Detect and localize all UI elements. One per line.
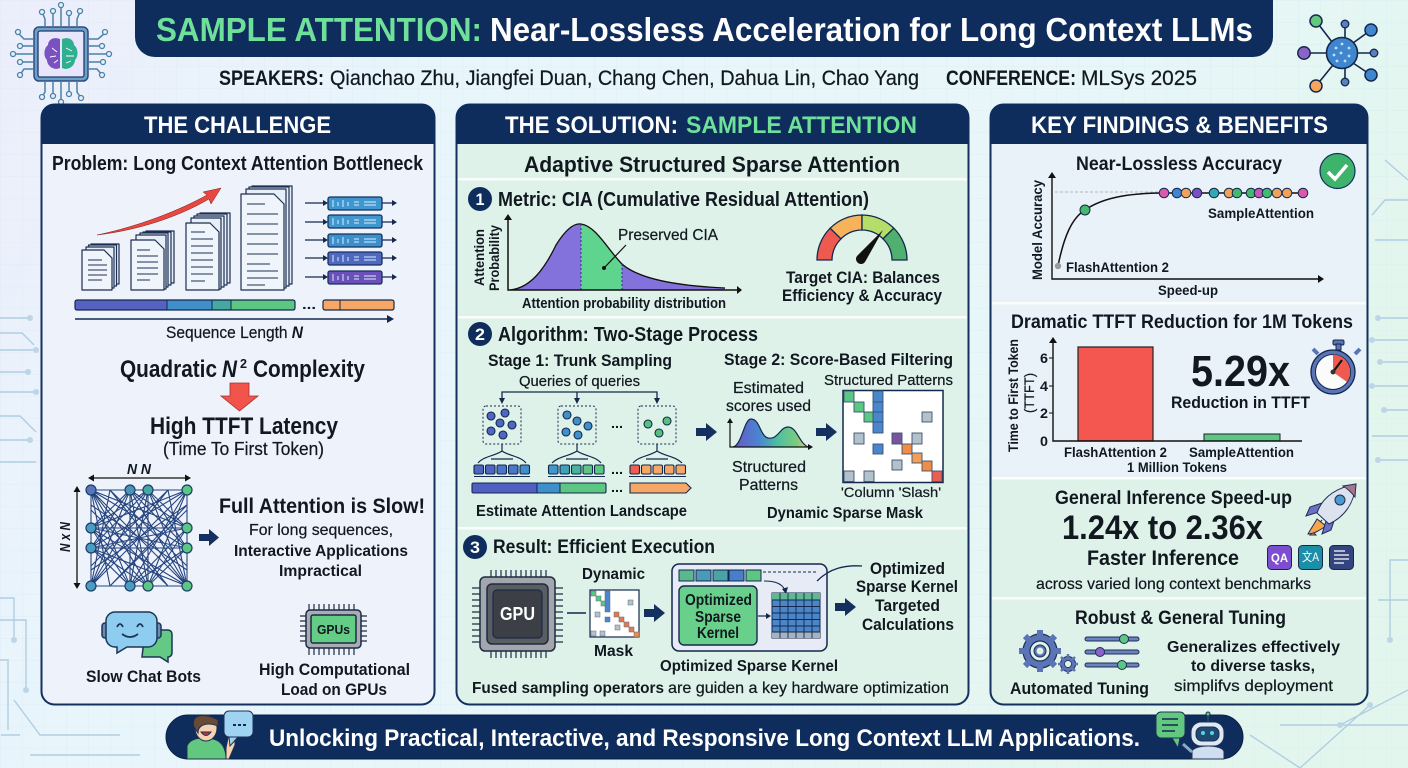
gauge caption xyxy=(782,268,942,305)
finding: near-lossless accuracy xyxy=(1029,154,1355,298)
gauge: target cia xyxy=(817,215,907,264)
chart: ttft bars: FlashAttention 2 xyxy=(1064,444,1167,460)
stat: 1.24x to 2.36x: 1.24x to 2.36x xyxy=(1062,509,1263,547)
finding: robust tuning: Robust & General Tuning xyxy=(1075,608,1286,629)
diagram: full attention network: N x N xyxy=(57,521,74,552)
icon: brain chip xyxy=(10,2,112,104)
panel heading: THE CHALLENGE xyxy=(144,112,331,139)
targeted calculations text: Sparse Kernel xyxy=(856,577,958,596)
finding: robust tuning: Automated Tuning xyxy=(1010,679,1149,698)
icon: stopwatch xyxy=(1311,340,1360,394)
chart: ttft bars: SampleAttention xyxy=(1189,444,1294,460)
chart: ttft bars: (TTFT) xyxy=(1022,373,1037,413)
finding: ttft reduction: Dramatic TTFT Reduction for 1M Tokens xyxy=(1011,312,1353,333)
tuning description xyxy=(1167,639,1340,695)
footer banner xyxy=(166,711,1243,759)
icon: gears xyxy=(1019,630,1078,674)
arrow: to full attention xyxy=(199,529,219,546)
section 3: result xyxy=(463,535,958,697)
chart: ttft bars: 2 xyxy=(1040,405,1048,421)
stage 2: score-based filtering: Stage 2: Score-Based Filtering xyxy=(724,350,953,369)
panel: the solution xyxy=(456,104,969,704)
panel heading xyxy=(505,112,917,139)
section 3: result: Result: Efficient Execution xyxy=(493,537,715,558)
panel: key findings xyxy=(990,104,1368,704)
stage 2: score-based filtering: Patterns xyxy=(739,477,798,494)
complexity text xyxy=(120,356,366,383)
chart: ttft bars: Time to First Token xyxy=(1006,339,1021,452)
finding: robust tuning xyxy=(1010,608,1340,698)
stat: 5.29x: 5.29x xyxy=(1191,347,1290,396)
speakers and conference line: CONFERENCE: xyxy=(946,67,1076,90)
panel heading: SAMPLE ATTENTION xyxy=(686,112,917,139)
finding: ttft reduction xyxy=(1006,312,1360,475)
finding: general inference speed-up: Faster Inference xyxy=(1087,547,1239,570)
panel: the challenge xyxy=(41,104,435,704)
title banner xyxy=(135,0,1273,57)
chart: accuracy vs speed-up: SampleAttention xyxy=(1208,205,1314,221)
gauge caption: Target CIA: Balances xyxy=(786,268,940,287)
dynamic mask: Dynamic xyxy=(582,566,645,583)
section 2: algorithm xyxy=(468,322,953,522)
icon: gpu: GPU xyxy=(500,604,535,624)
chart: ttft bars xyxy=(1006,337,1302,475)
targeted calculations text: Calculations xyxy=(862,615,954,634)
finding: general inference speed-up: across varied long context benchmarks xyxy=(1036,576,1311,593)
text block: full attention is slow: Full Attention is Slow! xyxy=(219,495,425,518)
chart: attention probability distribution: Probability xyxy=(486,225,502,291)
label: high computational load: Load on GPUs xyxy=(281,680,387,699)
complexity text: 2 xyxy=(240,356,247,371)
targeted calculations text xyxy=(856,559,958,634)
dynamic mask xyxy=(582,566,645,660)
icon: robot with speech bubble xyxy=(1156,712,1224,759)
fused sampling note: Fused sampling operators xyxy=(472,680,664,697)
axis label: sequence length: Sequence Length N xyxy=(166,323,304,342)
fused sampling note: are guiden a key hardware optimization xyxy=(668,680,949,697)
latency heading: High TTFT Latency xyxy=(150,413,339,440)
speakers and conference line: MLSys 2025 xyxy=(1081,67,1197,90)
arrow: stage 1 to stage 2 xyxy=(696,423,717,441)
stage 1: trunk sampling: Estimate Attention Landscape xyxy=(476,503,687,520)
panel heading: THE SOLUTION: xyxy=(505,112,678,139)
section 1: metric xyxy=(468,187,942,312)
stage 1: trunk sampling: ... xyxy=(611,415,623,431)
finding: near-lossless accuracy: Near-Lossless Accuracy xyxy=(1076,154,1282,175)
stage 1: trunk sampling: ... xyxy=(611,479,623,495)
diagram: full attention network: N N xyxy=(127,461,152,478)
icons: benchmark tasks: 文A xyxy=(1302,549,1319,564)
token rows xyxy=(305,197,397,284)
title banner: Near-Lossless Acceleration for Long Context LLMs xyxy=(490,11,1253,48)
icon: gpu chip: GPUs xyxy=(317,622,350,637)
finding: general inference speed-up xyxy=(1036,484,1356,593)
tuning description: Generalizes effectively xyxy=(1167,639,1340,656)
complexity text: N xyxy=(222,356,238,383)
stage 2: score-based filtering xyxy=(724,350,953,522)
stage 2: score-based filtering: Structured xyxy=(732,459,806,476)
icon: gpu xyxy=(472,570,563,658)
icon: neural hub xyxy=(1298,15,1378,92)
stage 1: trunk sampling xyxy=(472,351,691,520)
label: slow chat bots: Slow Chat Bots xyxy=(86,667,201,686)
stage 2: score-based filtering: Structured Patterns xyxy=(824,373,953,389)
chart: attention probability distribution: Attention probability distribution xyxy=(522,295,726,312)
icons: benchmark tasks xyxy=(1268,546,1354,570)
chart: attention probability distribution: Attention xyxy=(471,229,487,286)
chart: ttft bars: 6 xyxy=(1040,350,1048,366)
finding: general inference speed-up: General Inference Speed-up xyxy=(1055,488,1292,509)
targeted calculations text: Targeted xyxy=(875,596,940,615)
kernel label: Optimized Sparse Kernel xyxy=(660,658,838,675)
chart: accuracy vs speed-up: FlashAttention 2 xyxy=(1066,259,1169,275)
sequence bar xyxy=(75,296,394,323)
label: high computational load xyxy=(259,660,410,699)
icon: person with speech bubble xyxy=(187,711,253,759)
complexity text: Quadratic xyxy=(120,356,217,383)
dynamic mask: Mask xyxy=(594,643,633,660)
section 3: result: 3 xyxy=(470,538,480,557)
icon: gpu chip xyxy=(300,604,367,655)
icon: chat bot xyxy=(102,612,172,662)
complexity text: Complexity xyxy=(253,356,366,383)
chart: attention probability distribution xyxy=(471,214,742,312)
chart: accuracy vs speed-up: Model Accuracy xyxy=(1029,180,1045,280)
icon: check xyxy=(1320,154,1355,188)
kernel box: Sparse xyxy=(695,609,741,626)
kernel box: Kernel xyxy=(697,625,739,642)
speakers and conference line: SPEAKERS: xyxy=(219,67,324,90)
stage 1: trunk sampling: ... xyxy=(611,461,623,477)
stage 1: trunk sampling: Queries of queries xyxy=(519,374,640,390)
text block: full attention is slow: For long sequences, xyxy=(249,522,393,539)
section 2: algorithm: 2 xyxy=(475,325,485,344)
title text: SAMPLE ATTENTION: xyxy=(156,11,482,48)
stage 2: score-based filtering: scores used xyxy=(726,398,811,415)
subheading: Adaptive Structured Sparse Attention xyxy=(524,152,900,177)
section 1: metric: Metric: CIA (Cumulative Residual Attention) xyxy=(498,189,869,211)
icon: sliders xyxy=(1085,634,1139,670)
section 2: algorithm: Algorithm: Two-Stage Process xyxy=(498,324,758,346)
arrow: red growth xyxy=(97,188,221,235)
arrow: to targeted calculations xyxy=(835,598,856,616)
latency subtext: (Time To First Token) xyxy=(163,439,324,459)
arrow: mask to kernel xyxy=(644,604,665,622)
targeted calculations text: Optimized xyxy=(870,559,945,578)
tuning description: simplifvs deployment xyxy=(1174,678,1334,695)
kernel box: Optimized xyxy=(685,592,752,609)
chart: ttft bars: 0 xyxy=(1040,433,1048,449)
chart: ttft bars: 1 Million Tokens xyxy=(1127,459,1227,475)
callout leader xyxy=(817,566,862,581)
section 1: metric: 1 xyxy=(476,190,484,209)
label: high computational load: High Computational xyxy=(259,660,410,679)
chart: attention probability distribution: Preserved CIA xyxy=(618,227,718,244)
stage 1: trunk sampling: Stage 1: Trunk Sampling xyxy=(488,351,672,370)
arrow: red down xyxy=(221,383,258,411)
sequence bar: ... xyxy=(302,296,316,312)
chart: accuracy vs speed-up: Speed-up xyxy=(1158,282,1218,298)
icon: rocket xyxy=(1306,484,1356,535)
stage 2: score-based filtering: 'Column 'Slash' xyxy=(841,484,941,500)
text block: full attention is slow xyxy=(219,495,425,580)
text block: full attention is slow: Interactive Applications xyxy=(234,543,408,560)
diagram: full attention network xyxy=(57,461,192,591)
chart: ttft bars: 4 xyxy=(1040,378,1048,394)
icon: growing document stacks xyxy=(82,186,292,290)
text block: full attention is slow: Impractical xyxy=(279,563,362,580)
footer text: Unlocking Practical, Interactive, and Responsive Long Context LLM Applications. xyxy=(269,725,1140,752)
subheading: Problem: Long Context Attention Bottleneck xyxy=(52,153,424,175)
icons: benchmark tasks: QA xyxy=(1271,553,1288,565)
chart: accuracy vs speed-up xyxy=(1029,172,1324,298)
panel heading: KEY FINDINGS & BENEFITS xyxy=(1031,112,1328,139)
stat label: Reduction in TTFT xyxy=(1171,393,1311,412)
kernel box xyxy=(672,564,827,651)
speakers and conference line: Qianchao Zhu, Jiangfei Duan, Chang Chen, Dahua Lin, Chao Yang xyxy=(330,67,919,90)
mask matrix xyxy=(843,390,943,482)
stage 2: score-based filtering: Estimated xyxy=(733,380,804,397)
speakers and conference line xyxy=(219,67,1197,90)
tuning description: to diverse tasks, xyxy=(1191,658,1315,675)
gauge caption: Efficiency & Accuracy xyxy=(782,286,942,305)
stage 2: score-based filtering: Dynamic Sparse Mask xyxy=(767,505,923,522)
fused sampling note xyxy=(472,680,949,697)
